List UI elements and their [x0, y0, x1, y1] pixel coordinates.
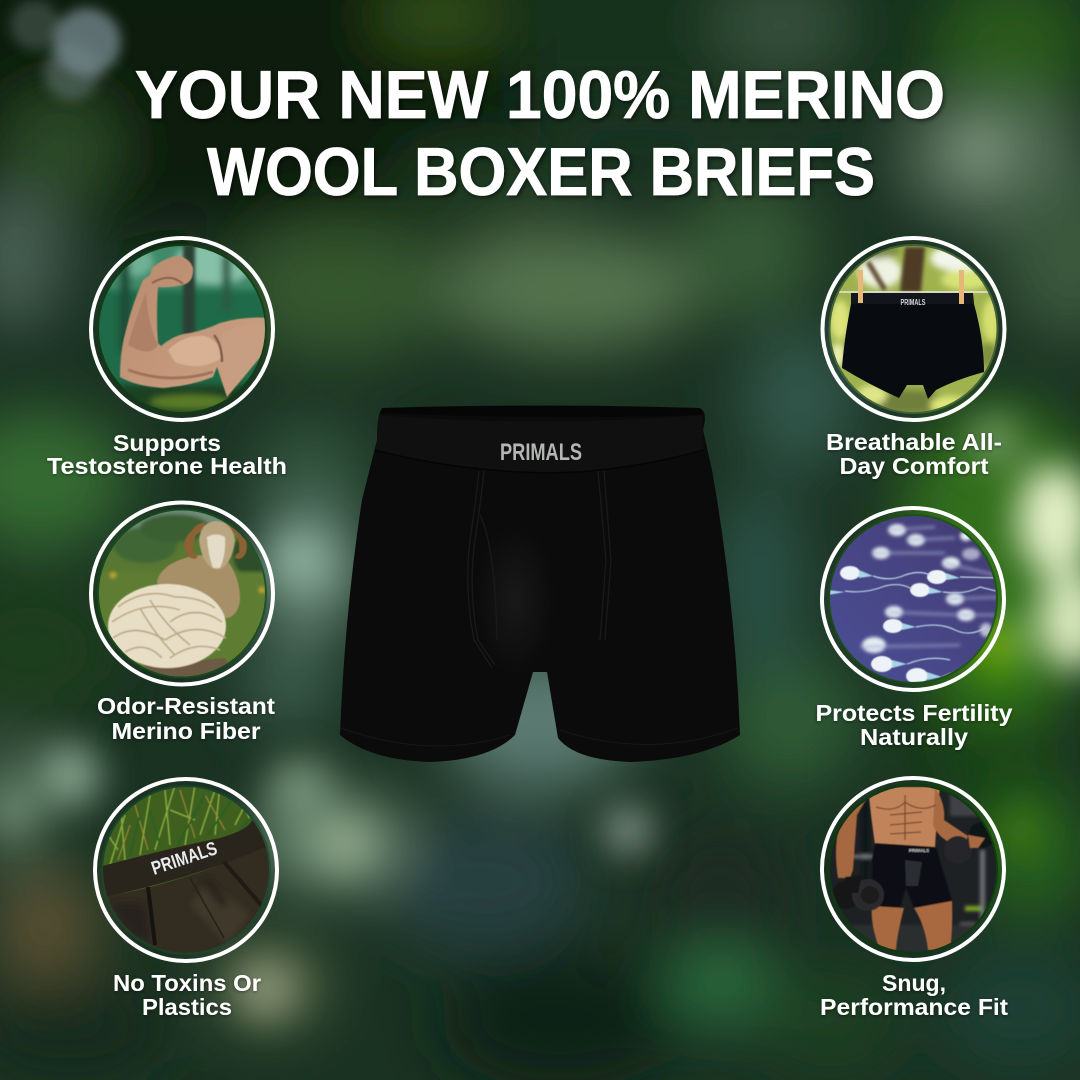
label: odor-resistant merino fiber: [97, 693, 275, 744]
label: odor-resistant merino fiber: Merino Fiber: [112, 718, 261, 744]
label: protects fertility naturally: [816, 700, 1013, 750]
bokeh top left: [10, 0, 121, 100]
circle: boxers on clothesline: PRIMALS: [900, 298, 926, 307]
label: snug performance fit: Performance Fit: [820, 994, 1008, 1020]
label: breathable all-day comfort: [826, 429, 1002, 479]
label: protects fertility naturally: Naturally: [860, 724, 968, 750]
label: supports testosterone health: Testosterone Health: [47, 453, 287, 479]
circle: waistband on grass: [95, 779, 280, 961]
circle: sperm illustration: [822, 508, 1005, 690]
waistband logo: PRIMALS: [500, 439, 582, 466]
circle: man in boxers at gym: PRIMALS: [909, 848, 929, 853]
label: no toxins or plastics: No Toxins Or: [113, 970, 261, 996]
label: snug performance fit: Snug,: [882, 970, 946, 996]
label: breathable all-day comfort: Day Comfort: [840, 453, 989, 479]
fly seams: [468, 471, 611, 668]
title: WOOL BOXER BRIEFS: [207, 134, 875, 210]
circle: waistband on grass: PRIMALS: [149, 838, 220, 880]
label: protects fertility naturally: Protects Fertility: [816, 700, 1013, 726]
circle: testosterone (flexed arm in forest): [90, 238, 275, 425]
title: [135, 57, 945, 210]
product: black boxer briefs: [340, 406, 740, 762]
circle: merino sheep and wool knot: [90, 502, 277, 687]
circle: man in boxers at gym: [822, 778, 1005, 960]
label: odor-resistant merino fiber: Odor-Resistant: [97, 693, 275, 719]
label: no toxins or plastics: Plastics: [142, 994, 232, 1020]
title: YOUR NEW 100% MERINO: [135, 57, 945, 133]
label: no toxins or plastics: [113, 970, 261, 1020]
label: supports testosterone health: Supports: [113, 430, 221, 456]
waistband: [376, 416, 379, 445]
label: snug performance fit: [820, 970, 1008, 1020]
label: breathable all-day comfort: Breathable All-: [826, 429, 1002, 455]
label: supports testosterone health: [47, 430, 287, 479]
circle: boxers on clothesline: [822, 238, 1005, 420]
